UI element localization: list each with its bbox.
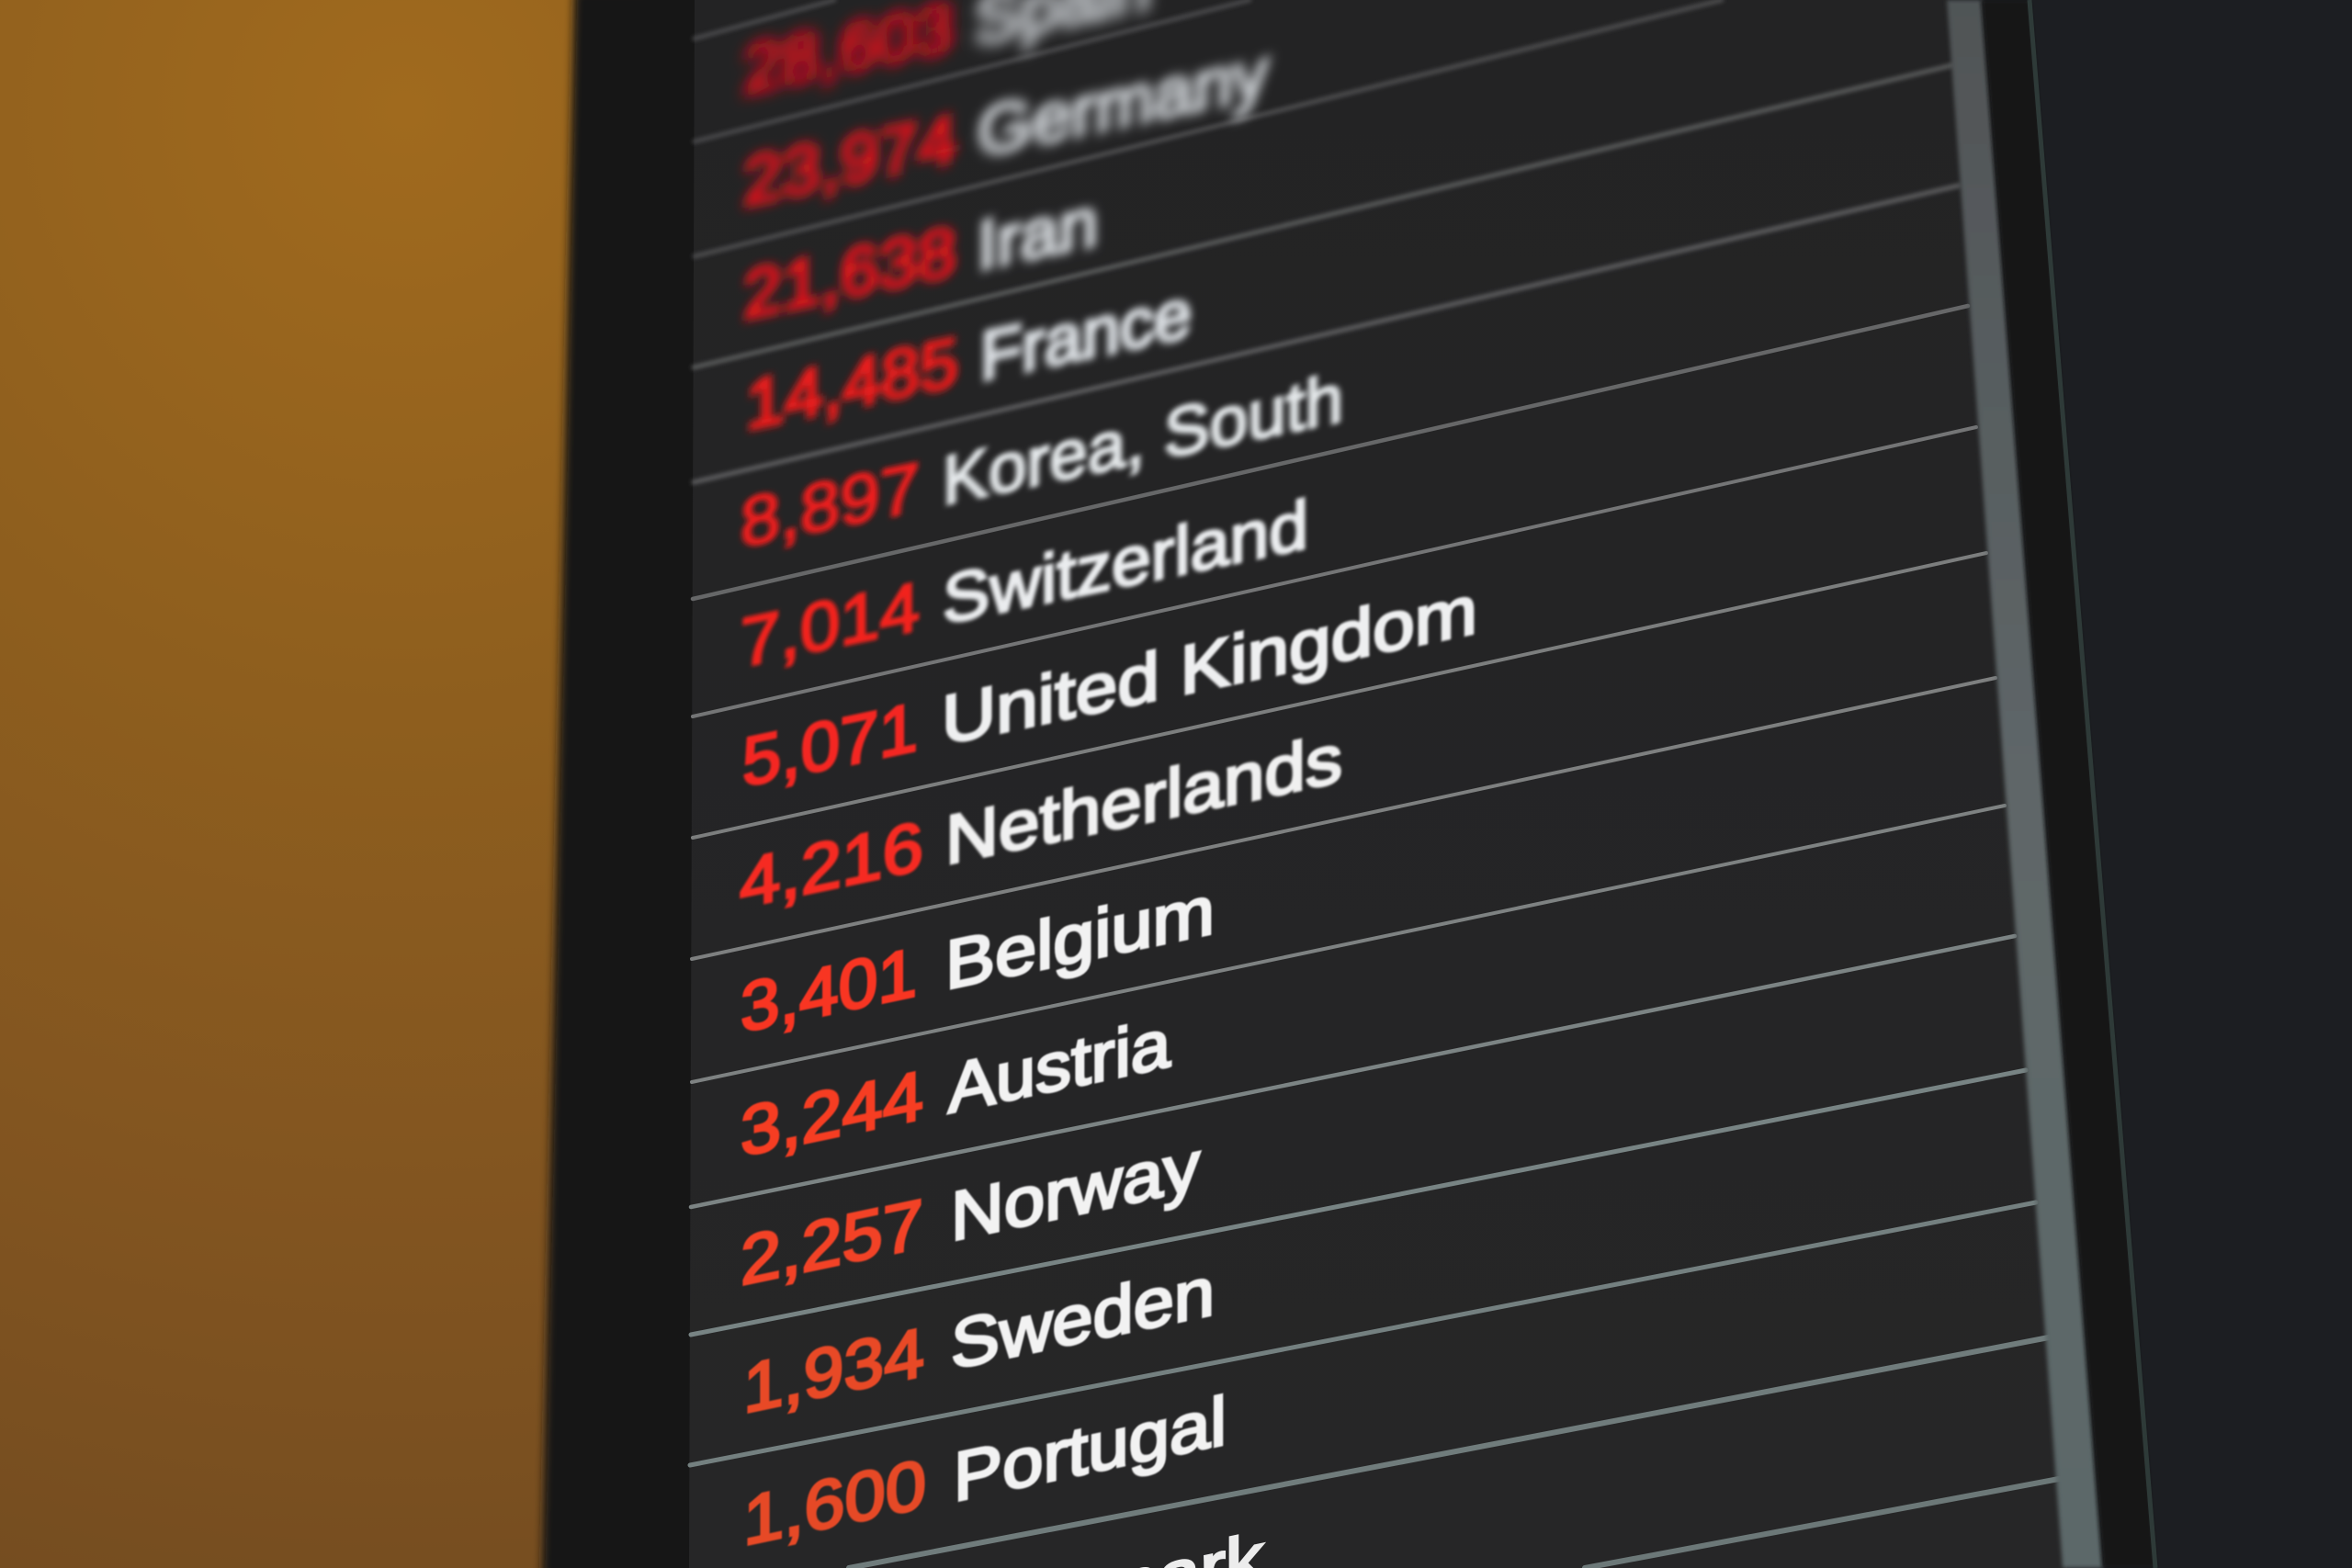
- row: Germany: Germany: [978, 34, 1268, 173]
- monitor background to the right: [1746, 0, 2352, 1568]
- row: Norway: [741, 1127, 1200, 1301]
- thin screen edge line: [2030, 0, 2155, 1568]
- row: Sweden: Sweden: [951, 1252, 1215, 1385]
- row: Portugal: 1,600: [743, 1445, 926, 1561]
- row: Norway: 2,257: [741, 1185, 923, 1301]
- row: Switzerland: [741, 486, 1308, 682]
- row: Sweden: 1,934: [743, 1314, 924, 1428]
- data panel: [689, 0, 2067, 1568]
- row: Iran: Iran: [978, 183, 1098, 286]
- row: Norway: Norway: [951, 1127, 1200, 1257]
- row: Switzerland: Switzerland: [943, 486, 1308, 640]
- row: United Kingdom: United Kingdom: [942, 570, 1477, 761]
- dark strip beside scrollbar: [1982, 0, 2155, 1568]
- row: Netherlands: Netherlands: [945, 719, 1342, 880]
- row: Belgium: [741, 871, 1215, 1048]
- row: Belgium: 3,401: [741, 933, 917, 1048]
- row: Portugal: Portugal: [954, 1382, 1227, 1517]
- row: Austria: 3,244: [741, 1056, 923, 1172]
- row: United Kingdom: 5,071: [742, 688, 918, 802]
- row: Austria: [741, 1004, 1171, 1172]
- row: Korea, South: Korea, South: [943, 359, 1343, 521]
- scrollbar track: [1947, 0, 2103, 1568]
- monitor left bezel: [542, 0, 827, 1568]
- row: Iran: 21,638: [743, 212, 956, 334]
- row: Netherlands: 4,216: [740, 807, 923, 923]
- background: blurred orange wall: [0, 0, 643, 1568]
- row: Austria: Austria: [948, 1004, 1171, 1128]
- row: Belgium: Belgium: [945, 871, 1215, 1005]
- row: France: [746, 275, 1192, 446]
- row: Portugal: [743, 1382, 1227, 1561]
- row: Korea, South: 8,897: [741, 448, 920, 563]
- row: France: France: [980, 275, 1192, 396]
- row: Spain: [743, 0, 1151, 109]
- row: United Kingdom: [742, 570, 1477, 802]
- row: Netherlands: [740, 719, 1342, 923]
- panel divider lines: [690, 0, 2059, 1568]
- row: Sweden: [743, 1252, 1215, 1428]
- row: Korea, South: [741, 359, 1343, 563]
- row: Germany: [743, 34, 1268, 221]
- row: Switzerland: 7,014: [741, 568, 920, 682]
- row: Germany: 23,974: [743, 99, 956, 221]
- row: Iran: [743, 183, 1098, 334]
- row: France: 14,485: [746, 323, 958, 446]
